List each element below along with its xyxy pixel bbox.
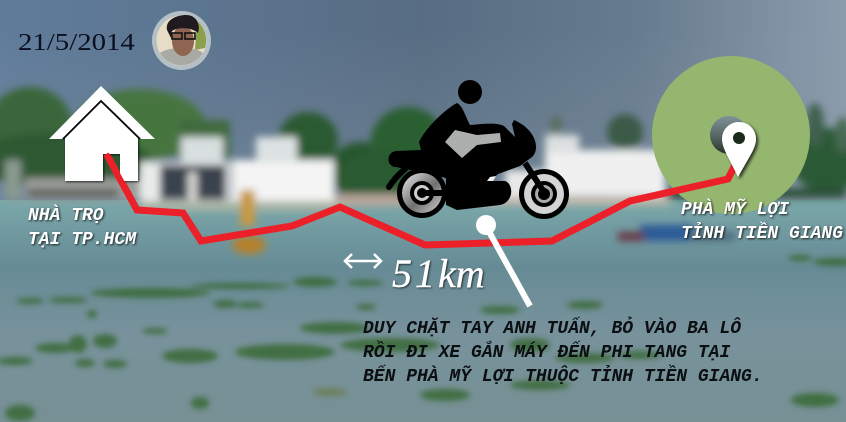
route inside doorway <box>106 154 127 192</box>
ferry 1 <box>140 162 230 203</box>
description text: DUY CHẶT TAY ANH TUẤN, BỎ VÀO BA LÔ RỒI ĐI XE GẮN MÁY ĐẾN PHI TANG TẠI BẾN PHÀ MỸ LỢI THUỘC TỈNH TIỀN GIANG. <box>363 319 763 387</box>
distance value: 51km <box>392 251 485 296</box>
date: 21/5/2014 <box>18 30 135 56</box>
shore <box>334 194 404 206</box>
right ferry <box>545 150 665 196</box>
destination label: PHÀ MỸ LỢI TỈNH TIỀN GIANG <box>681 200 843 244</box>
icon: house <box>49 86 155 181</box>
circle: destination area <box>652 56 810 214</box>
ferry 2 <box>232 160 334 204</box>
icon: map pin <box>722 122 756 177</box>
buoy <box>240 190 255 226</box>
icon: motorcycle with rider <box>388 80 569 219</box>
water plants <box>0 255 846 421</box>
trees <box>0 87 72 163</box>
boat <box>640 225 692 241</box>
avatar portrait <box>152 11 211 70</box>
icon: double arrow distance <box>345 254 381 268</box>
origin label: NHÀ TRỌ TẠI TP.HCM <box>28 206 136 250</box>
route line <box>107 155 736 245</box>
callout pointer <box>476 215 530 306</box>
